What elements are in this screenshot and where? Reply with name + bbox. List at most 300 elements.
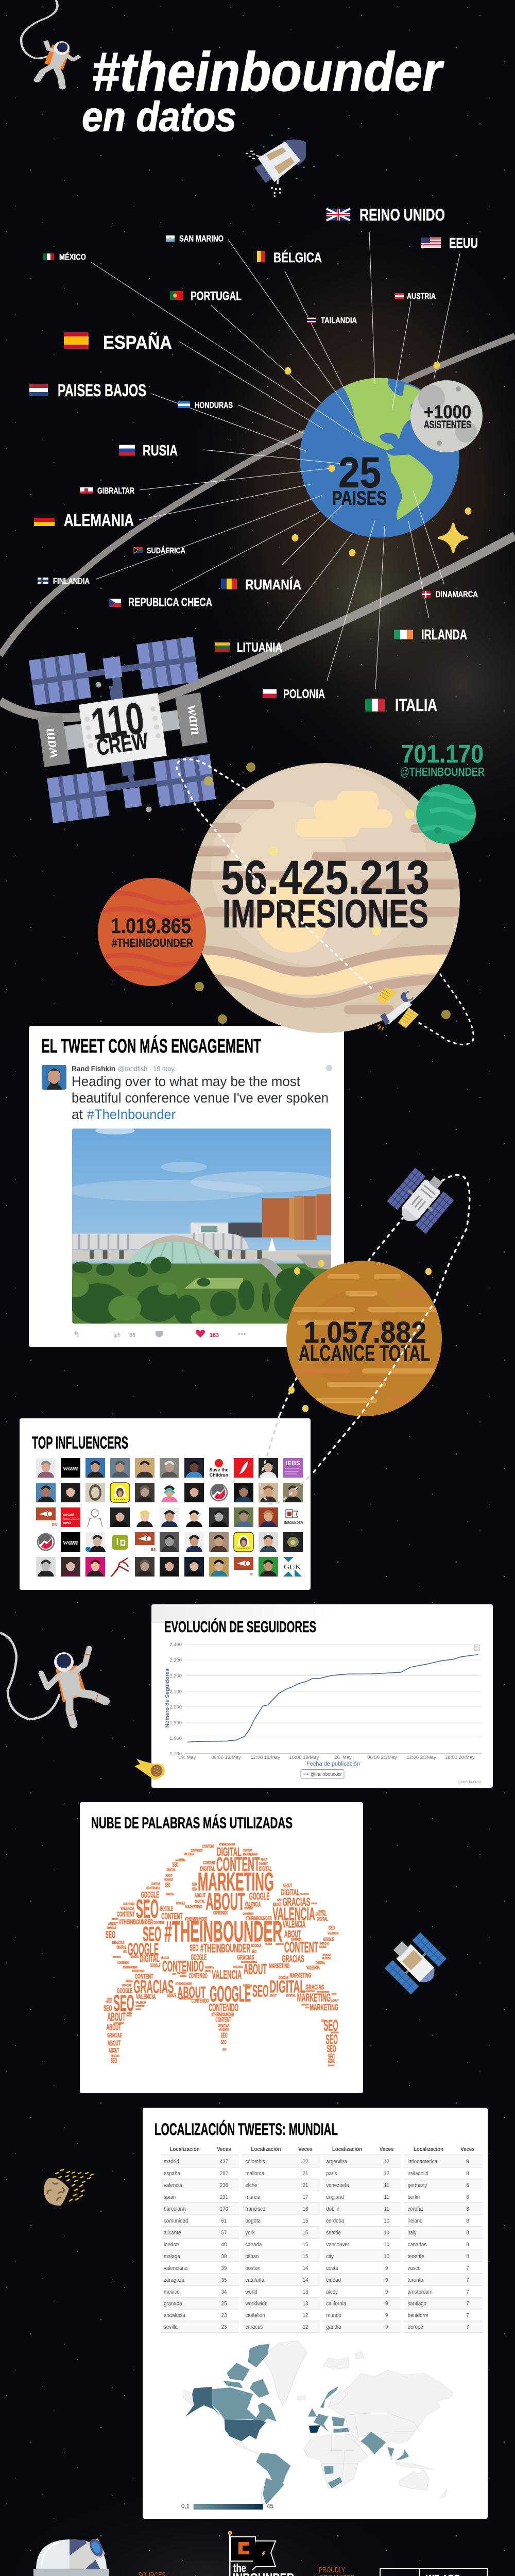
word cloud	[104, 1843, 339, 2067]
word cloud: SEO	[173, 1862, 178, 1869]
locations table: spain	[164, 2195, 176, 2200]
word cloud: VALENCIA	[135, 2002, 146, 2005]
locations table: 15	[303, 2230, 308, 2236]
locations table: bilbao	[245, 2254, 259, 2260]
locations table: Localización	[414, 2147, 443, 2153]
right side panel: wam	[184, 704, 205, 736]
word cloud: ABOUT	[269, 1994, 277, 1997]
locations table: 13	[303, 2301, 308, 2307]
locations table: sevilla	[164, 2325, 178, 2330]
locations table: 48	[221, 2242, 227, 2248]
word cloud: DIGITAL	[179, 1858, 184, 1860]
label: Sudáfrica: SUDÁFRICA	[147, 546, 185, 555]
word cloud: DIGITAL	[269, 1976, 305, 1996]
icon: capsule spacecraft	[246, 128, 315, 197]
word cloud: CONTENIDO	[291, 1938, 302, 1942]
word cloud: MARKETING	[269, 1962, 289, 1970]
locations table: 25	[221, 2301, 227, 2307]
mentions number: 701.170	[401, 740, 484, 768]
word cloud: VALENCIA	[306, 1965, 320, 1971]
locations table: santiago	[407, 2301, 426, 2307]
label: Gibraltar	[80, 486, 134, 496]
word cloud: DIGITAL	[316, 1960, 325, 1965]
locations table: 7	[466, 2278, 469, 2283]
line chart: 18:00 20/May	[445, 1755, 475, 1760]
locations table: 12	[303, 2325, 308, 2330]
word cloud: #THEINBOUNDER	[185, 1916, 207, 1922]
word cloud: DIGITAL	[281, 1888, 300, 1897]
space station: 110 crew	[29, 637, 216, 823]
locations table: elche	[245, 2183, 258, 2189]
left side panel	[38, 715, 70, 767]
locations table: caracas	[245, 2325, 263, 2330]
logo: The Inbounder Global 2016 Conference: the	[233, 2562, 246, 2574]
earth with continents	[300, 378, 459, 538]
dim gold dots	[195, 776, 451, 1019]
word cloud: ABOUT	[172, 1973, 177, 1975]
word cloud: CONTENT	[216, 1853, 260, 1875]
heading: EL TWEET CON MÁS ENGAGEMENT	[41, 1035, 261, 1057]
locations table: 12	[384, 2171, 389, 2177]
line chart: pirendo.com	[458, 1780, 481, 1784]
locations table: gandia	[326, 2325, 341, 2330]
label: Rumanía	[221, 577, 301, 592]
word cloud: #THEINBOUNDER	[164, 1915, 282, 1948]
astronaut with tether, top left	[21, 0, 80, 87]
word cloud: DIGITAL	[166, 1892, 174, 1896]
word cloud: GOOGLE	[319, 1945, 327, 1949]
word cloud: GOOGLE	[328, 2064, 334, 2067]
word cloud: VALENCIA	[300, 1892, 310, 1895]
locations table: 287	[220, 2171, 228, 2177]
planet: @theinbounder mentions	[400, 740, 485, 844]
locations table: 15	[303, 2218, 308, 2224]
word cloud: CONTENT	[203, 1860, 215, 1865]
locations table: 7	[466, 2313, 469, 2319]
label: Tailandia: TAILANDIA	[321, 316, 357, 325]
word cloud: ABOUT	[261, 1858, 267, 1862]
word cloud: SEO	[136, 1894, 159, 1924]
word cloud: CONTENT	[116, 1910, 135, 1918]
locations table: 23	[221, 2313, 227, 2319]
locations table: 16	[303, 2207, 308, 2212]
label: México: MÉXICO	[59, 252, 86, 262]
word cloud: CONTENIDO	[113, 2022, 124, 2024]
locations table: alicante	[164, 2230, 181, 2236]
locations table: canada	[245, 2242, 262, 2248]
word cloud: ABOUT	[332, 1992, 337, 1995]
word cloud: VALENCIA	[121, 1906, 134, 1911]
word cloud: VALENCIA	[212, 1967, 242, 1981]
tweet actions row	[73, 1330, 246, 1340]
word cloud: GOOGLE	[279, 1975, 289, 1980]
panel: follower growth chart	[151, 1604, 493, 1788]
small dots around the station	[96, 682, 255, 812]
word cloud: DIGITAL	[316, 1911, 327, 1917]
word cloud: SEO	[328, 2052, 335, 2062]
locations table: cordoba	[326, 2218, 345, 2224]
right side panel	[175, 692, 208, 747]
locations table: andalucia	[164, 2313, 185, 2319]
word cloud: SEO	[111, 2057, 117, 2064]
locations table: 9	[385, 2266, 388, 2272]
subtitle: en datos	[82, 94, 236, 140]
locations table: 11	[384, 2183, 389, 2189]
locations table: francisco	[245, 2207, 265, 2212]
tweet actions row: ↰	[73, 1331, 80, 1340]
label: San Marino: SAN MARINO	[179, 234, 224, 243]
avatar grid: IT	[250, 1573, 253, 1577]
line chart: 1,700	[169, 1751, 182, 1757]
locations table: 10	[384, 2254, 389, 2260]
word cloud: CONTENT	[151, 1882, 160, 1886]
locations table: 8	[466, 2218, 469, 2224]
line chart: 1,800	[169, 1736, 182, 1741]
icon: observatory	[33, 2537, 109, 2576]
locations table: city	[326, 2254, 334, 2260]
word cloud: GOOGLE	[128, 1939, 159, 1959]
locations table: seattle	[326, 2230, 341, 2236]
locations table: 35	[221, 2278, 227, 2283]
title	[82, 41, 444, 140]
locations table: costa	[326, 2266, 338, 2272]
label: Honduras: HONDURAS	[195, 400, 233, 410]
locations table: 8	[466, 2195, 469, 2200]
astronaut with tether, mid left	[1, 1633, 106, 1724]
avatar grid: nest	[63, 1520, 71, 1525]
locations table: venezuela	[326, 2183, 349, 2189]
label: Sudáfrica	[134, 546, 185, 555]
locations table: Localización	[332, 2147, 362, 2153]
word cloud: SEO	[113, 1990, 134, 2016]
word cloud: GRACIAS	[218, 2023, 229, 2028]
crew caption: CREW	[95, 728, 150, 760]
locations table: 12	[303, 2313, 308, 2319]
word cloud: SEO	[327, 2043, 336, 2054]
locations table: boston	[245, 2266, 261, 2272]
locations table: 7	[466, 2290, 469, 2295]
word cloud: ABOUT	[107, 2010, 126, 2024]
title: #theinbounder	[92, 41, 444, 103]
locations table: 21	[303, 2183, 308, 2189]
label: Portugal: PORTUGAL	[191, 290, 242, 303]
word cloud: CONTENIDO	[162, 1958, 204, 1975]
locations table: valencia	[164, 2183, 182, 2189]
word cloud: CONTENIDO	[177, 1972, 186, 1975]
locations table: Veces	[460, 2147, 475, 2153]
label: EEUU	[421, 235, 478, 251]
icon: comet	[134, 1759, 165, 1780]
locations table: 9	[385, 2325, 388, 2330]
moon caption: ASISTENTES	[424, 419, 471, 431]
word cloud: ABOUT	[106, 2023, 121, 2032]
word cloud: SEO	[123, 1950, 127, 1954]
word cloud: GRACIAS	[305, 1983, 324, 1991]
word cloud: MARKETING	[243, 1853, 258, 1857]
word cloud: ABOUT	[167, 1993, 176, 1998]
satellite with blue panels	[385, 1163, 458, 1236]
locations table: 15	[303, 2254, 308, 2260]
locations table: germany	[407, 2183, 427, 2189]
word cloud: VALENCIA	[136, 1992, 156, 2001]
label: Polonia: POLONIA	[283, 687, 325, 701]
avatar grid: IEBS	[286, 1460, 300, 1467]
locations table: 170	[220, 2207, 228, 2212]
line chart: 12:00 20/May	[406, 1755, 436, 1760]
crew number: 110	[88, 693, 147, 750]
locations table: mundo	[326, 2313, 341, 2319]
locations table: 15	[303, 2242, 308, 2248]
word cloud: DIGITAL	[195, 1899, 205, 1904]
label: Lituania: LITUANIA	[237, 640, 282, 655]
locations table: Localización	[251, 2147, 281, 2153]
word cloud: GRACIAS	[133, 1977, 174, 1997]
word cloud: MARKETING	[176, 1859, 185, 1861]
word cloud: DIGITAL	[126, 1980, 133, 1984]
line chart: Número de Seguidores	[164, 1668, 170, 1727]
label: Italia: ITALIA	[395, 696, 437, 715]
word cloud: ABOUT	[109, 2046, 119, 2054]
word cloud: CONTENT	[244, 1907, 253, 1910]
word cloud: GRACIAS	[282, 1895, 311, 1909]
label: Austria	[395, 292, 436, 301]
heading: TOP INFLUENCERS	[32, 1433, 128, 1452]
locations table: london	[164, 2242, 179, 2248]
word cloud: GOOGLE	[191, 1953, 207, 1962]
word cloud: SEO	[323, 2017, 338, 2035]
earth stat: 25 countries: 25	[338, 448, 381, 497]
line chart: 1,900	[169, 1720, 182, 1726]
word cloud: GOOGLE	[127, 2012, 132, 2014]
avatar grid: Children	[210, 1472, 228, 1478]
word cloud: #THEINBOUNDER	[212, 2012, 234, 2018]
word cloud: ABOUT	[108, 1921, 118, 1926]
line chart: @theinbounder	[311, 1771, 342, 1777]
word cloud: GOOGLE	[112, 1918, 118, 1920]
small satellite with yellow panels	[376, 987, 419, 1030]
locations table: benidorm	[407, 2313, 428, 2319]
word cloud: ABOUT	[108, 2039, 121, 2047]
avatar grid: Save the	[209, 1467, 229, 1472]
word cloud: CONTENIDO	[209, 2002, 238, 2014]
map colour scale: 0,1	[181, 2503, 190, 2510]
word cloud: CONTENT	[259, 1862, 268, 1866]
locations table: tenerife	[407, 2254, 424, 2260]
locations table: 11	[384, 2195, 389, 2200]
word cloud: MARKETING	[297, 1992, 331, 2005]
locations table: Veces	[298, 2147, 313, 2153]
word cloud: DIGITAL	[116, 1945, 127, 1950]
word cloud: DIGITAL	[217, 1844, 242, 1859]
word cloud: CONTENT	[215, 2016, 231, 2024]
avatar grid	[36, 1458, 303, 1577]
word cloud: GRACIAS	[112, 1940, 125, 1945]
line chart: 2,200	[169, 1673, 182, 1679]
locations table: madrid	[164, 2159, 179, 2165]
decorative yellow dots and star	[284, 362, 472, 556]
word cloud: MARKETING	[289, 1972, 311, 1979]
earth stat: 25 countries: PAISES	[332, 487, 387, 510]
label: Rusia	[119, 443, 178, 459]
line chart: 18:00 19/May	[289, 1755, 319, 1760]
locations table: 7	[466, 2325, 469, 2330]
word cloud: GRACIAS	[282, 1953, 304, 1964]
hashtag caption: #THEINBOUNDER	[112, 936, 193, 950]
word cloud: SEO	[329, 1925, 335, 1931]
word cloud: VALENCIA	[184, 1853, 194, 1856]
word cloud: MARKETING	[132, 1970, 145, 1973]
word cloud: CONTENT	[284, 1939, 318, 1956]
word cloud: MARKETING	[198, 1868, 274, 1896]
word cloud: SEO	[252, 1949, 256, 1954]
label: Bélgica	[253, 249, 322, 265]
word cloud: GOOGLE	[323, 1937, 334, 1942]
locations table: 8	[466, 2230, 469, 2236]
word cloud: VALENCIA	[283, 1919, 305, 1930]
label: Tailandia	[307, 316, 357, 325]
label: Austria: AUSTRIA	[407, 292, 436, 301]
word cloud: #THEINBOUNDER	[176, 1982, 192, 1986]
locations table: granada	[164, 2301, 182, 2307]
avatar grid: ES	[52, 1523, 57, 1527]
locations table: 13	[303, 2290, 308, 2295]
locations table: vancouver	[326, 2242, 350, 2248]
word cloud: VALENCIA	[205, 1966, 214, 1970]
tweet text: at	[72, 1107, 83, 1122]
word cloud: VALENCIA	[328, 1931, 339, 1936]
word cloud: DIGITAL	[259, 1865, 272, 1873]
word cloud: VALENCIA	[322, 1957, 331, 1960]
word cloud: MARKETING	[310, 2003, 338, 2012]
locations table: 34	[221, 2290, 227, 2295]
label: Reino Unido	[327, 206, 445, 224]
avatar grid: ES	[151, 1548, 156, 1552]
label: Reino Unido: REINO UNIDO	[359, 206, 445, 224]
orbit rings around the earth	[0, 336, 515, 718]
locations table: italy	[407, 2230, 417, 2236]
locations table: amsterdam	[407, 2290, 433, 2295]
locations table: 39	[221, 2266, 227, 2272]
locations table: 437	[220, 2159, 228, 2165]
locations table: 9	[466, 2159, 469, 2165]
label: México	[43, 252, 86, 262]
panel: word cloud	[80, 1802, 363, 2093]
word cloud: ABOUT	[177, 1984, 205, 2002]
locations table: ciudad	[326, 2278, 341, 2283]
word cloud: DIGITAL	[167, 1868, 176, 1872]
locations table: 10	[384, 2242, 389, 2248]
locations table: ireland	[407, 2218, 423, 2224]
label: Italia	[365, 696, 437, 715]
reach caption: ALCANCE TOTAL	[299, 1341, 430, 1366]
word cloud: MARKETING	[301, 2003, 308, 2006]
line chart: 2,000	[169, 1704, 182, 1710]
word cloud: SEO	[106, 1929, 115, 1941]
avatar grid: social	[63, 1512, 74, 1517]
word cloud: GOOGLE	[150, 1962, 161, 1968]
line chart: Fecha de publicación	[306, 1761, 360, 1767]
line chart: 2,300	[169, 1658, 182, 1663]
tweet actions row: 56	[129, 1332, 135, 1338]
word cloud: VALENCIA	[272, 1904, 315, 1925]
panel: tweet locations	[143, 2108, 488, 2519]
locations table: Localización	[170, 2147, 200, 2153]
locations table: 17	[303, 2195, 308, 2200]
locations table: Veces	[380, 2147, 394, 2153]
word cloud: DIGITAL	[140, 1953, 160, 1964]
planet: #theinbounder hashtag	[98, 878, 211, 986]
word cloud: SEO	[192, 1887, 197, 1892]
word cloud: CONTENT	[243, 1849, 252, 1852]
map colour scale	[181, 2503, 273, 2510]
word cloud: #THEINBOUNDER	[200, 1941, 250, 1955]
locations table: 8	[466, 2207, 469, 2212]
word cloud: GRACIAS	[107, 2032, 122, 2039]
word cloud: VALENCIA	[135, 2008, 141, 2010]
word cloud: CONTENT	[202, 1844, 215, 1849]
tweet author: @randfish · 19 may.	[118, 1064, 176, 1073]
word cloud: VALENCIA	[318, 1909, 325, 1912]
word cloud: GRACIAS	[233, 1965, 243, 1969]
locations table: alcoy	[326, 2290, 338, 2295]
word cloud: VALENCIA	[180, 1975, 187, 1977]
word cloud: GRACIAS	[320, 1942, 329, 1946]
tweet text: beautiful conference venue I've ever spoken	[72, 1090, 329, 1106]
planet number: 56.425.213	[221, 851, 430, 904]
locations table: 14	[303, 2266, 308, 2272]
label: Irlanda	[394, 626, 467, 642]
label: República Checa	[109, 596, 212, 609]
word cloud: SEO	[321, 2019, 325, 2023]
word cloud: GOOGLE	[164, 1878, 173, 1882]
word cloud: MARKETING	[241, 1961, 258, 1964]
panel: top influencers	[20, 1416, 312, 1590]
word cloud: GOOGLE	[141, 1890, 159, 1900]
avatar	[42, 1065, 66, 1090]
word cloud: ABOUT	[205, 1889, 245, 1916]
locations table: Veces	[217, 2147, 231, 2153]
word cloud: MARKETING	[135, 2005, 145, 2007]
label: Irlanda: IRLANDA	[421, 626, 467, 642]
locations table: 21	[303, 2171, 308, 2177]
word cloud: CONTENIDO	[191, 1849, 203, 1853]
label: San Marino	[166, 234, 224, 243]
locations table: 231	[220, 2195, 228, 2200]
locations table	[161, 2147, 483, 2333]
dashed orbit lower right of big planet	[416, 974, 473, 1045]
word cloud: MARKETING	[276, 1943, 284, 1945]
solar panels	[29, 637, 216, 823]
label: Gibraltar: GIBRALTAR	[97, 486, 134, 496]
word cloud: SEO	[221, 2039, 227, 2046]
word cloud: SEO	[326, 2032, 338, 2047]
word cloud: MARKETING	[331, 2031, 339, 2034]
label: Lituania	[215, 640, 282, 655]
line chart: 06:00 19/May	[211, 1755, 241, 1760]
word cloud: #THEINBOUNDER	[317, 1990, 329, 1993]
word cloud: #THEINBOUNDER	[123, 1965, 138, 1970]
label: Dinamarca	[422, 589, 478, 599]
logo: The Inbounder Global 2016 Conference	[228, 2531, 294, 2576]
word cloud: GRACIAS	[131, 1956, 139, 1959]
word cloud: DIGITAL	[317, 1916, 328, 1922]
locations table: coruña	[407, 2207, 423, 2212]
word cloud: CONTENT	[135, 1973, 153, 1980]
heading: LOCALIZACIÓN TWEETS: MUNDIAL	[154, 2120, 338, 2139]
word cloud: CONTENIDO	[189, 1972, 208, 1980]
locations table: colombia	[245, 2159, 265, 2165]
tweet actions row: ⇄	[114, 1331, 121, 1340]
